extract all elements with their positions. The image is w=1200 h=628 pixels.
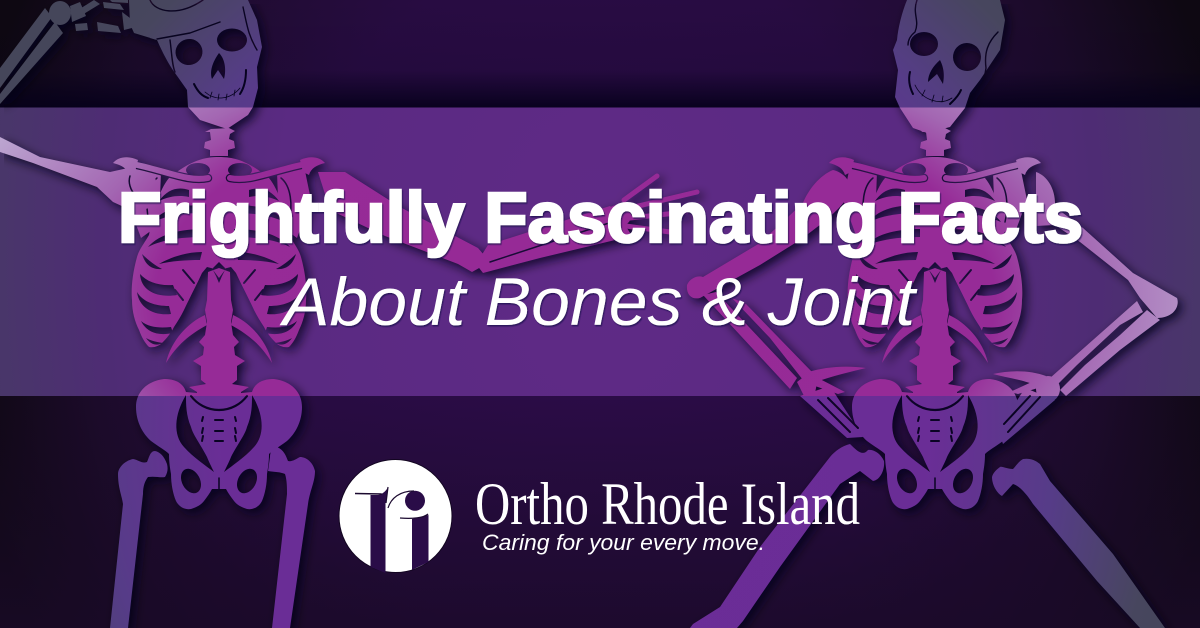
right skeleton: [670, 0, 1200, 628]
logo wordmark: Ortho Rhode Island: [475, 471, 860, 537]
subtitle: About Bones & Joint: [279, 264, 918, 340]
bottom shading: [0, 396, 1200, 628]
logo tagline: Caring for your every move.: [482, 530, 765, 555]
title band: [0, 108, 1200, 396]
top bar shading: [0, 0, 1200, 108]
left skeleton: [0, 0, 724, 628]
logo mark: [339, 460, 452, 573]
title: Frightfully Fascinating Facts: [118, 179, 1083, 258]
